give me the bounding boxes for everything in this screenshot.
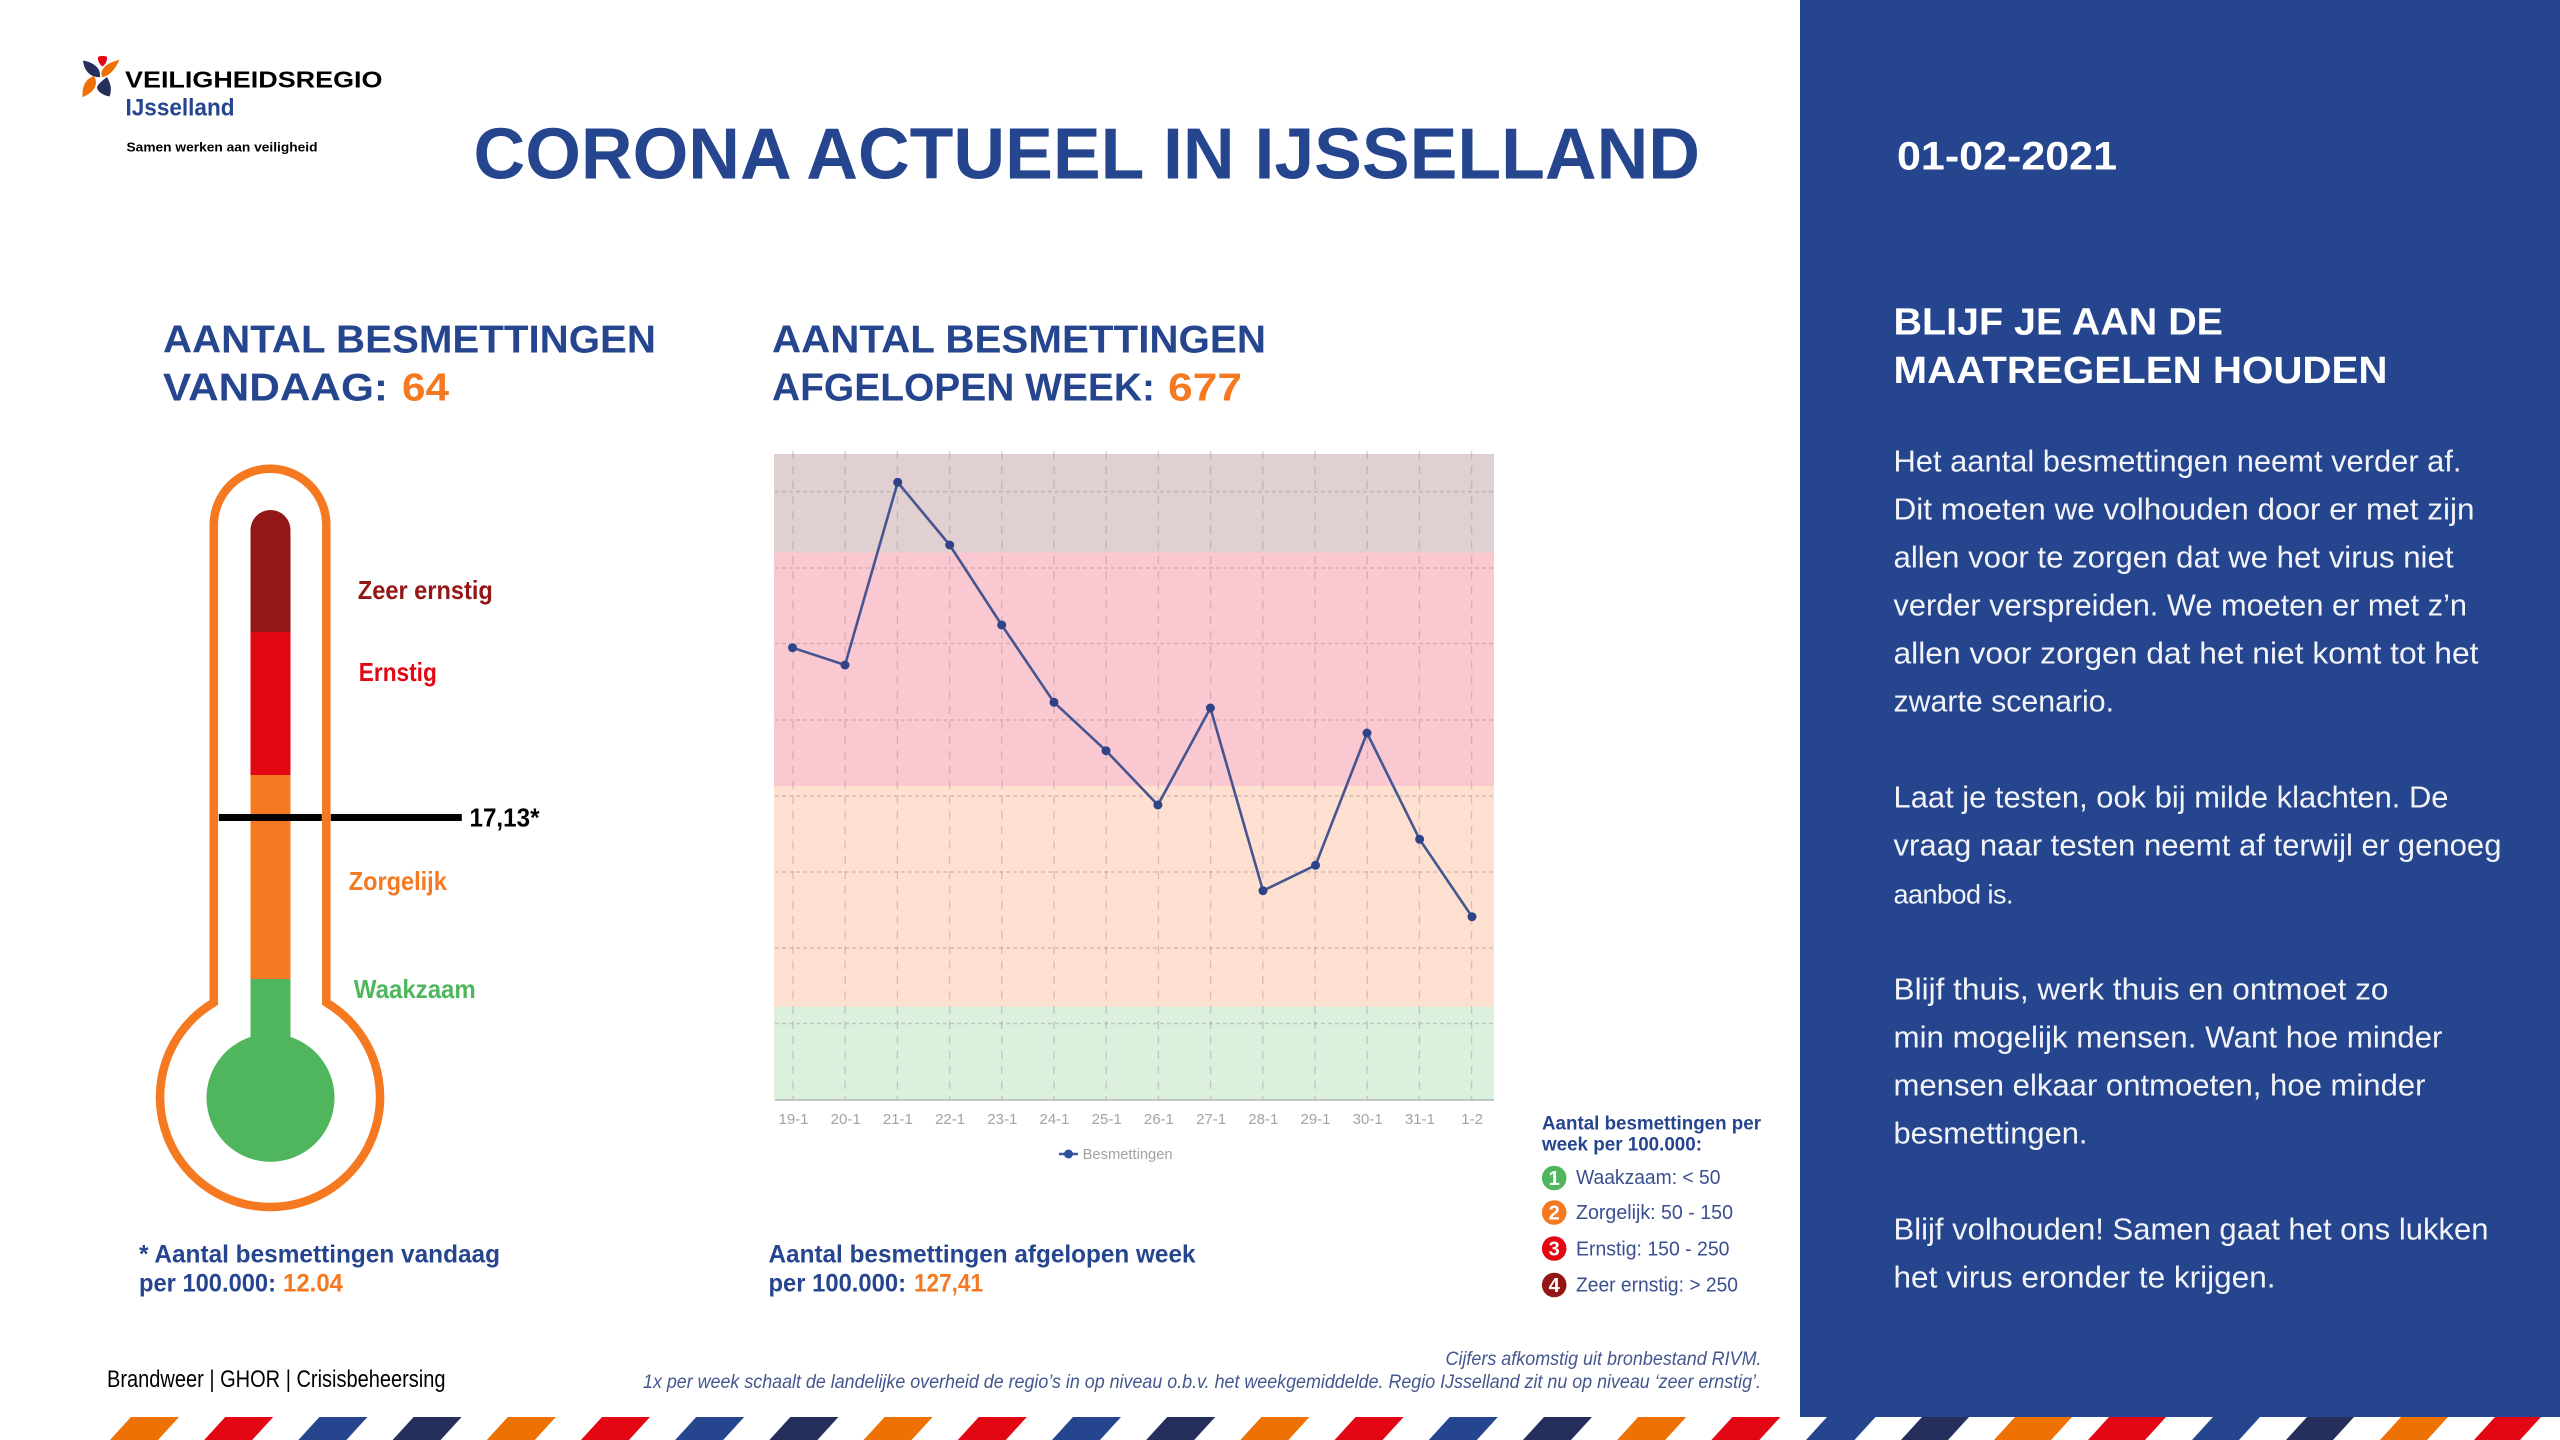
panel: measures sidebar xyxy=(1800,0,2560,1417)
legend item 2: Zorgelijk: 50 - 150 xyxy=(1576,1202,1733,1224)
x axis labels: 19-1 xyxy=(778,1111,809,1128)
chart band: zeer ernstig xyxy=(774,454,1494,552)
airmail stripe border xyxy=(110,1417,2541,1440)
heading: infections past week: AANTAL BESMETTINGEN xyxy=(772,319,1266,362)
logo wordmark: VEILIGHEIDSREGIO xyxy=(125,66,382,92)
x axis labels: 22-1 xyxy=(935,1111,965,1128)
legend item 1: 1 xyxy=(1549,1168,1560,1190)
note: today per 100,000 xyxy=(139,1240,500,1298)
sidebar body text: min mogelijk mensen. Want hoe minder xyxy=(1894,1019,2442,1054)
note: today per 100,000: * Aantal besmettingen vandaag xyxy=(139,1240,500,1268)
sidebar heading: BLIJF JE AAN DE xyxy=(1894,302,2223,344)
sidebar body text xyxy=(1894,443,2502,1294)
source note: Cijfers afkomstig uit bronbestand RIVM. xyxy=(1446,1349,1762,1370)
source note: 1x per week schaalt de landelijke overheid de regio’s in op niveau o.b.v. het weekgemiddelde. Regio IJsselland zit nu op niveau ‘zeer ernstig’. xyxy=(643,1372,1761,1393)
sidebar body text: verder verspreiden. We moeten er met z’n xyxy=(1894,587,2467,622)
sidebar body text: allen voor te zorgen dat we het virus niet xyxy=(1894,539,2454,574)
thermometer segment: ernstig xyxy=(250,632,290,775)
note: week per 100,000: per 100.000: xyxy=(768,1270,906,1298)
label: zeer ernstig: Zeer ernstig xyxy=(358,575,493,605)
source note xyxy=(643,1349,1762,1393)
x axis labels: 30-1 xyxy=(1353,1111,1383,1128)
legend item 4: Zeer ernstig: > 250 xyxy=(1576,1275,1738,1297)
heading: infections past week xyxy=(772,319,1266,410)
chart band: ernstig xyxy=(774,552,1494,786)
x axis labels: 27-1 xyxy=(1196,1111,1226,1128)
sidebar body text: Dit moeten we volhouden door er met zijn xyxy=(1894,491,2474,526)
sidebar body text: Laat je testen, ook bij milde klachten. De xyxy=(1894,779,2448,814)
thermometer segment: zorgelijk xyxy=(250,775,290,979)
chart band: zorgelijk xyxy=(774,786,1494,1007)
note: week per 100,000: Aantal besmettingen afgelopen week xyxy=(768,1240,1196,1268)
x axis labels: 21-1 xyxy=(883,1111,913,1128)
legend item 4: 4 xyxy=(1549,1275,1561,1297)
legend item 3: 3 xyxy=(1549,1238,1560,1260)
legend heading: Aantal besmettingen per xyxy=(1542,1113,1762,1134)
date: 01-02-2021 xyxy=(1897,134,2117,178)
legend item 3: Ernstig: 150 - 250 xyxy=(1576,1239,1730,1261)
thermometer segment: zeer ernstig xyxy=(250,510,290,632)
sidebar body text: Het aantal besmettingen neemt verder af. xyxy=(1894,443,2462,478)
heading: infections today: VANDAAG: xyxy=(163,367,388,410)
thermometer gauge xyxy=(160,469,540,1207)
sidebar body text: mensen elkaar ontmoeten, hoe minder xyxy=(1894,1067,2426,1102)
note: week per 100,000 xyxy=(768,1240,1196,1298)
x axis labels: 26-1 xyxy=(1144,1111,1174,1128)
heading: infections today: 64 xyxy=(402,367,449,410)
sidebar body text: besmettingen. xyxy=(1894,1115,2088,1150)
x axis labels: 1-2 xyxy=(1461,1111,1483,1128)
sidebar body text: vraag naar testen neemt af terwijl er genoeg xyxy=(1894,827,2502,862)
marker value: 17,13* xyxy=(470,803,540,833)
legend heading: week per 100.000: xyxy=(1541,1135,1702,1156)
icon: logo figure xyxy=(82,56,120,97)
sidebar body text: zwarte scenario. xyxy=(1894,683,2114,718)
sidebar body text: aanbod is. xyxy=(1894,879,2014,909)
logo: Veiligheidsregio IJsselland xyxy=(82,56,383,154)
legend: levels per week per 100,000 xyxy=(1541,1113,1762,1297)
thermometer outline xyxy=(160,469,380,1207)
x axis labels: 31-1 xyxy=(1405,1111,1435,1128)
heading: infections today xyxy=(163,319,656,410)
sidebar heading: MAATREGELEN HOUDEN xyxy=(1894,350,2388,392)
footer organisations: Brandweer | GHOR | Crisisbeheersing xyxy=(107,1366,446,1393)
logo tagline: Samen werken aan veiligheid xyxy=(126,140,318,154)
heading: infections today: AANTAL BESMETTINGEN xyxy=(163,319,656,362)
sidebar body text: Blijf volhouden! Samen gaat het ons lukken xyxy=(1894,1211,2488,1246)
label: ernstig: Ernstig xyxy=(359,657,437,687)
sidebar body text: allen voor zorgen dat het niet komt tot het xyxy=(1894,635,2479,670)
note: today per 100,000: per 100.000: xyxy=(139,1270,276,1298)
title: CORONA ACTUEEL IN IJSSELLAND xyxy=(474,114,1700,194)
x axis labels: 29-1 xyxy=(1300,1111,1331,1128)
sidebar body text: het virus eronder te krijgen. xyxy=(1894,1259,2276,1294)
x axis labels: 25-1 xyxy=(1092,1111,1122,1128)
logo region name: IJsselland xyxy=(126,95,234,122)
heading: infections past week: AFGELOPEN WEEK: xyxy=(772,367,1155,410)
x axis labels: 24-1 xyxy=(1039,1111,1070,1128)
label: waakzaam: Waakzaam xyxy=(354,974,476,1004)
chart band: waakzaam xyxy=(774,1007,1494,1100)
legend item 2: 2 xyxy=(1549,1202,1560,1224)
legend item 1: Waakzaam: < 50 xyxy=(1576,1167,1720,1189)
note: week per 100,000: 127,41 xyxy=(914,1270,983,1298)
line chart: infections per 100,000 xyxy=(774,451,1494,1163)
x axis labels: 23-1 xyxy=(987,1111,1017,1128)
x axis labels xyxy=(778,1111,1483,1128)
thermometer segment: waakzaam with bulb xyxy=(207,979,334,1162)
note: today per 100,000: 12.04 xyxy=(283,1270,343,1298)
sidebar heading xyxy=(1894,302,2388,392)
legend heading xyxy=(1541,1113,1762,1156)
heading: infections past week: 677 xyxy=(1168,367,1242,410)
label: zorgelijk: Zorgelijk xyxy=(349,866,447,896)
marker line at 17,13 xyxy=(219,814,462,821)
sidebar body text: Blijf thuis, werk thuis en ontmoet zo xyxy=(1894,971,2388,1006)
x axis labels: 20-1 xyxy=(831,1111,861,1128)
chart legend: Besmettingen xyxy=(1083,1146,1173,1163)
x axis labels: 28-1 xyxy=(1248,1111,1278,1128)
data line: Besmettingen xyxy=(788,478,1476,921)
